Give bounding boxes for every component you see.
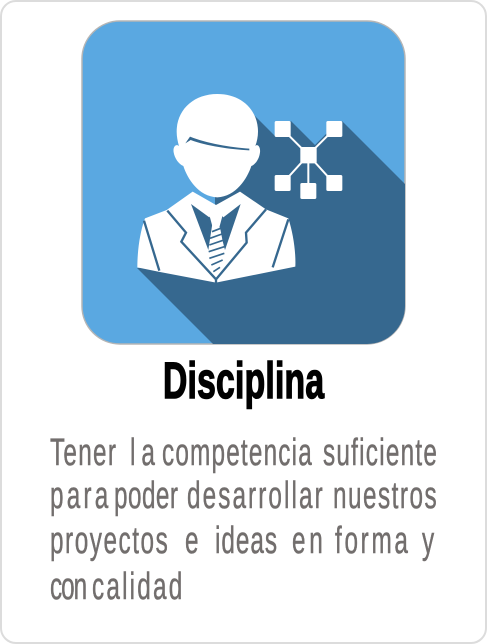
person <box>137 94 295 283</box>
shirt opening and tie <box>191 204 241 250</box>
description text: calidad <box>92 564 182 607</box>
description text: poder <box>114 473 178 516</box>
hairline <box>185 137 249 150</box>
description text: forma <box>335 518 408 561</box>
description text: nuestros <box>333 473 437 516</box>
description text: la <box>130 430 155 473</box>
icon: businessman with network <box>82 21 420 360</box>
suit lapels <box>144 209 288 283</box>
description text: en <box>292 518 323 561</box>
network diagram <box>275 121 342 199</box>
description text: desarrollar <box>187 473 323 516</box>
description text: proyectos <box>50 518 168 561</box>
description text: para <box>50 473 108 516</box>
description text <box>50 430 437 607</box>
description text: y <box>422 518 434 561</box>
description text: e <box>185 518 199 561</box>
heading: Disciplina <box>163 353 325 410</box>
description text: suficiente <box>323 430 437 473</box>
description text: con <box>50 564 87 607</box>
long shadow <box>137 115 405 344</box>
description text: competencia <box>162 430 312 473</box>
description text: ideas <box>215 518 277 561</box>
description text: Tener <box>50 430 116 473</box>
